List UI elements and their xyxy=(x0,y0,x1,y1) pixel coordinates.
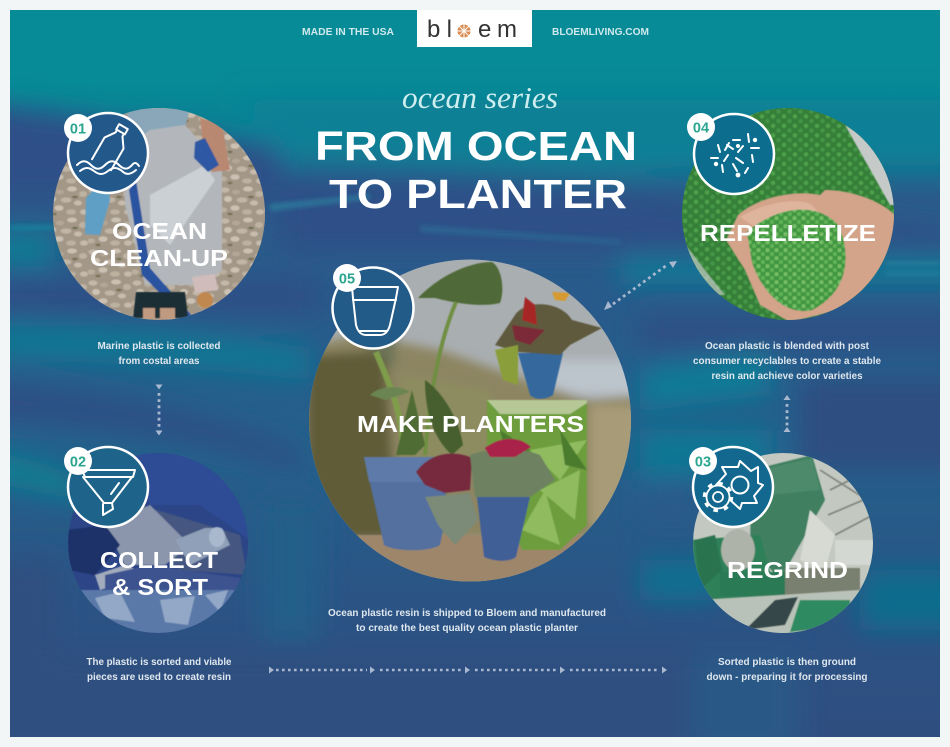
step 05 caption xyxy=(328,608,606,634)
arrow: step 03 to step 04 xyxy=(784,395,790,432)
step 04 caption: Ocean plastic is blended with post xyxy=(705,341,870,352)
step 02 caption: pieces are used to create resin xyxy=(87,672,231,683)
step 05 caption: to create the best quality ocean plastic planter xyxy=(356,623,578,634)
logo box: e xyxy=(478,16,491,43)
main heading line 2: TO PLANTER xyxy=(329,171,627,217)
arrow: step 01 to step 02 xyxy=(156,384,162,436)
step 05 badge: 05 xyxy=(339,272,355,288)
step 05 caption: Ocean plastic resin is shipped to Bloem and manufactured xyxy=(328,608,606,619)
step 02 title: & SORT xyxy=(112,574,208,600)
step 01 caption: Marine plastic is collected xyxy=(98,341,220,352)
step 04 caption xyxy=(693,341,881,382)
step 05 title: MAKE PLANTERS xyxy=(357,411,584,437)
header bar xyxy=(302,10,649,47)
step 02 title: COLLECT xyxy=(100,547,218,573)
step 03 badge: 03 xyxy=(695,454,711,470)
logo box xyxy=(417,10,532,47)
arrow: step 02 to step 03 xyxy=(269,666,667,674)
step 02 title xyxy=(100,547,218,600)
step 04 photo: repelletize xyxy=(680,105,900,325)
step 03 caption: Sorted plastic is then ground xyxy=(718,657,856,668)
main heading line 1: FROM OCEAN xyxy=(315,123,637,169)
step 04 title: REPELLETIZE xyxy=(700,220,876,246)
step 03 caption xyxy=(706,657,868,683)
step 04 caption: consumer recyclables to create a stable xyxy=(693,356,881,367)
logo box: bl xyxy=(427,16,452,43)
step 02 caption xyxy=(86,657,232,683)
step 02 photo: collect and sort xyxy=(68,453,248,633)
step 01 caption: from costal areas xyxy=(118,356,200,367)
step 04 badge: 04 xyxy=(693,120,709,136)
step 03 icon: saw blade and gear xyxy=(689,447,773,527)
step 01 icon: bottle in waves xyxy=(64,113,148,193)
step 02 caption: The plastic is sorted and viable xyxy=(86,657,232,668)
step 01 title: OCEAN xyxy=(112,218,207,244)
logo box: m xyxy=(497,16,517,43)
step 01 title xyxy=(90,218,228,271)
step 02 icon: funnel xyxy=(64,447,148,527)
step 01 photo: ocean clean-up xyxy=(50,105,270,325)
step 03 caption: down - preparing it for processing xyxy=(706,672,868,683)
step 01 title: CLEAN-UP xyxy=(90,245,228,271)
step 01 badge: 01 xyxy=(70,122,86,138)
step 04 icon: pellets xyxy=(687,113,774,194)
step 05 photo: make planters xyxy=(305,255,640,585)
step 05 icon: planter xyxy=(332,264,414,348)
step 03 title: REGRIND xyxy=(727,557,848,583)
header text: website: BLOEMLIVING.COM xyxy=(552,27,649,38)
step 03 photo: regrind xyxy=(693,453,873,633)
arrow: step 04 to step 05 xyxy=(604,261,677,310)
script subtitle: ocean series xyxy=(402,80,558,115)
step 01 caption xyxy=(98,341,220,367)
step 02 badge: 02 xyxy=(70,454,86,470)
header text: made in the USA: MADE IN THE USA xyxy=(302,27,394,38)
step 04 caption: resin and achieve color varieties xyxy=(712,371,863,382)
title block xyxy=(315,80,637,217)
